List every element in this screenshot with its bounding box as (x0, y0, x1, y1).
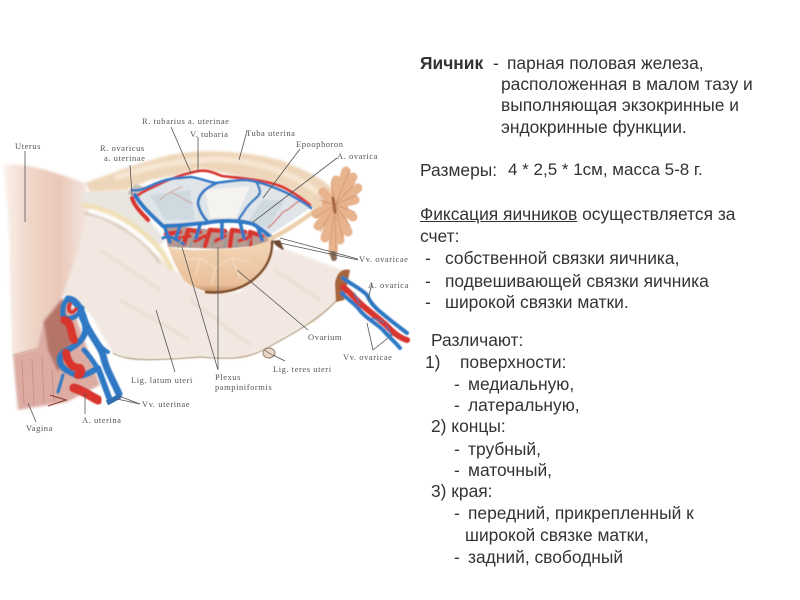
text block: definition of the ovary: эндокринные функции. (501, 117, 687, 137)
text block: distinguishing features: трубный, (468, 439, 541, 459)
anatomical labels: Vv. uterinae (142, 399, 190, 409)
text block: dimensions (420, 160, 703, 180)
ovary (168, 240, 272, 293)
anatomical labels: R. ovaricus (100, 143, 145, 153)
text block: distinguishing features: поверхности: (460, 352, 566, 372)
anatomical labels: Lig. latum uteri (131, 375, 193, 385)
anatomical labels (15, 116, 409, 433)
left uterine vessels and vagina (13, 298, 120, 410)
text block: fixation of the ovaries: - (425, 271, 431, 291)
text block: distinguishing features: - (454, 395, 460, 415)
round ligament (263, 348, 275, 358)
text block: distinguishing features: широкой связке матки, (465, 525, 649, 545)
text block: distinguishing features: - (454, 503, 460, 523)
text block: distinguishing features: 2) концы: (431, 416, 506, 436)
text block: definition of the ovary: парная половая железа, (507, 53, 704, 73)
fallopian tube (85, 151, 334, 212)
text block: definition of the ovary: расположенная в малом тазу и (501, 74, 753, 94)
text block: distinguishing features: задний, свободный (468, 547, 623, 567)
text block: fixation of the ovaries: счет: (420, 226, 459, 246)
uterus (3, 164, 90, 355)
right ovarian vessels (335, 270, 407, 348)
text block: distinguishing features: - (454, 547, 460, 567)
uterine veins (58, 299, 119, 400)
text block: dimensions: Размеры: (420, 160, 497, 180)
anatomical labels: Epoophoron (296, 139, 344, 149)
anatomical labels: A. ovarica (337, 151, 378, 161)
text block: fixation of the ovaries: подвешивающей связки яичника (445, 271, 709, 291)
text block: fixation of the ovaries (420, 204, 736, 312)
anatomical labels: pampiniformis (215, 382, 272, 392)
mesosalpinx with vessels (127, 171, 312, 249)
anatomical illustration of the ovary (3, 116, 411, 433)
text block: distinguishing features: - (454, 374, 460, 394)
anatomical labels: Vv. ovaricae (359, 254, 408, 264)
text block: distinguishing features: 3) края: (431, 481, 492, 501)
text block: definition of the ovary: выполняющая экзокринные и (501, 95, 739, 115)
fimbriae (315, 170, 358, 258)
text block: distinguishing features: медиальную, (468, 374, 574, 394)
text block: definition of the ovary (420, 53, 753, 137)
text block: distinguishing features: передний, прикрепленный к (468, 503, 694, 523)
tubal and ovarian arteries (132, 171, 310, 246)
text block: distinguishing features: маточный, (468, 460, 552, 480)
text block: fixation of the ovaries: широкой связки матки. (445, 292, 629, 312)
text block: fixation of the ovaries: - (425, 292, 431, 312)
anatomical labels: Lig. teres uteri (273, 364, 332, 374)
anatomical labels: Ovarium (308, 332, 342, 342)
text block: distinguishing features: 1) (425, 352, 440, 372)
anatomical labels: a. uterinae (104, 153, 145, 163)
anatomical labels: Vv. ovaricae (343, 352, 392, 362)
anatomical labels: Plexus (215, 372, 241, 382)
text block: distinguishing features: - (454, 439, 460, 459)
text block: distinguishing features (425, 330, 694, 567)
leader lines (25, 127, 388, 422)
anatomical labels: V. tubaria (190, 129, 228, 139)
text block: fixation of the ovaries: - (425, 248, 431, 268)
anatomical labels: A. ovarica (368, 280, 409, 290)
ovarian ligament (268, 207, 320, 240)
text block: distinguishing features: - (454, 460, 460, 480)
text block: distinguishing features: латеральную, (468, 395, 580, 415)
anatomical labels: A. uterina (82, 415, 122, 425)
text block: definition of the ovary: Яичник (420, 53, 483, 73)
text block: distinguishing features: Различают: (431, 330, 523, 350)
ligament fold beneath the tube (82, 190, 172, 270)
text block: fixation of the ovaries: Фиксация яичников осуществляется за (420, 204, 735, 224)
anatomical labels: Vagina (26, 423, 53, 433)
text block: dimensions: 4 * 2,5 * 1см, масса 5-8 г. (508, 160, 703, 179)
text block: fixation of the ovaries: собственной связки яичника, (445, 248, 679, 268)
anatomical labels: R. tubarius a. uterinae (142, 116, 229, 126)
anatomical labels: Uterus (15, 141, 41, 151)
text block: definition of the ovary: - (493, 53, 499, 73)
anatomical labels: Tuba uterina (246, 128, 296, 138)
uterine artery coils (64, 304, 98, 400)
venous arcade (132, 177, 311, 244)
broad ligament of the uterus (10, 205, 343, 360)
vessel band above the ovary (163, 225, 272, 249)
